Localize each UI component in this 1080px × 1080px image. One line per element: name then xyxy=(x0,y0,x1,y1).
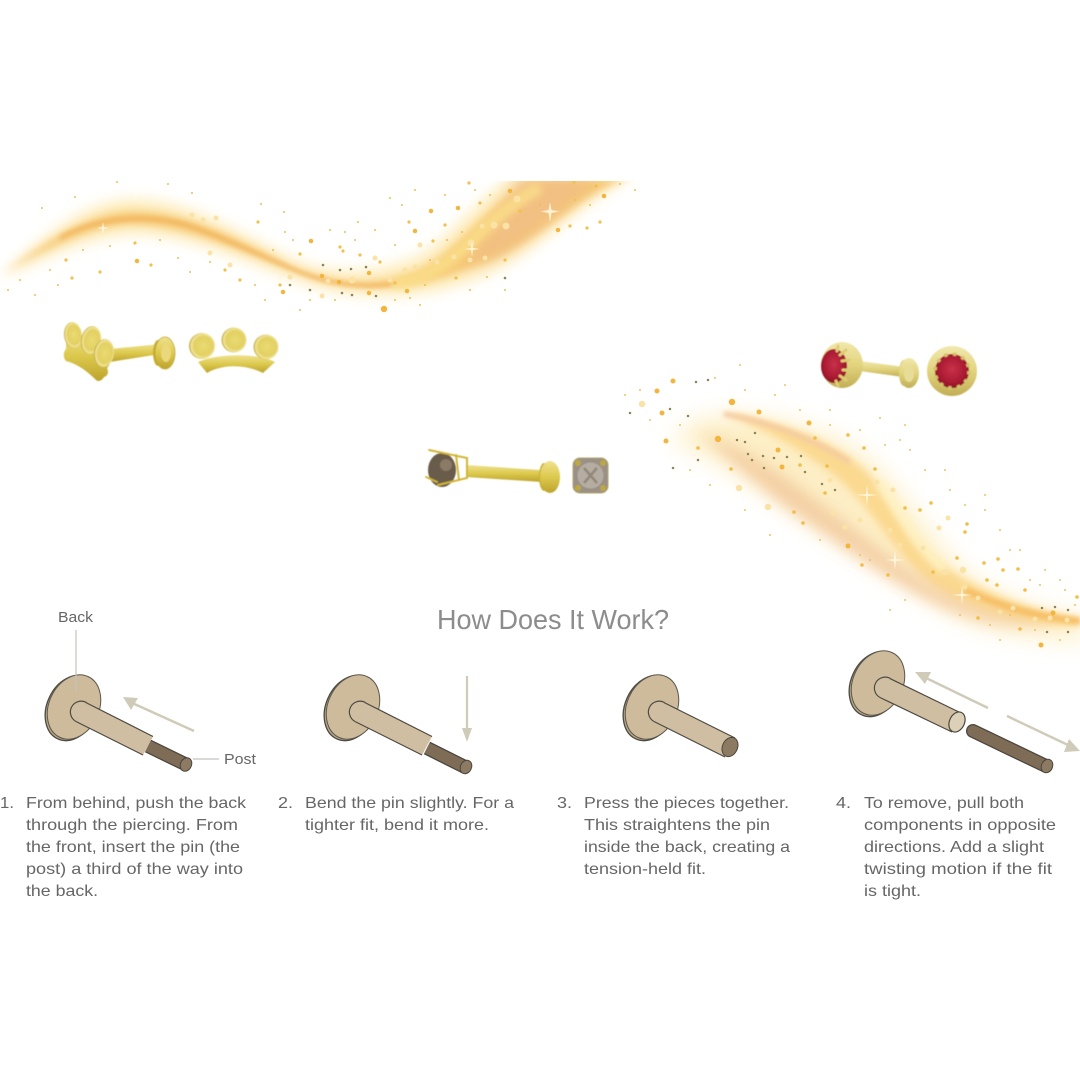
earring: ruby stud xyxy=(821,342,977,396)
step 4 text xyxy=(836,795,1056,900)
icon: sparkles on lower wave xyxy=(856,484,972,605)
step 2 text: Bend the pin slightly. For a xyxy=(305,795,514,812)
background swoosh: lower wave gold dots xyxy=(625,365,1077,645)
step 1 text: the back. xyxy=(26,883,98,900)
step 1 text xyxy=(0,795,247,900)
step 4 text: components in opposite xyxy=(864,817,1056,834)
step 2 text xyxy=(278,795,514,834)
step 4 text: directions. Add a slight xyxy=(864,839,1045,856)
crown stud xyxy=(189,328,278,373)
step 3 text: Press the pieces together. xyxy=(584,795,789,812)
diagram 4: pull apart to remove xyxy=(839,642,1080,775)
step 4 text: is tight. xyxy=(864,883,921,900)
label: Back xyxy=(58,609,94,692)
post piece xyxy=(427,748,474,776)
step 4 text: 4. xyxy=(836,795,851,812)
step 3 text: This straightens the pin xyxy=(584,817,770,834)
post piece xyxy=(973,731,1055,775)
paw head xyxy=(63,321,116,381)
back piece xyxy=(35,666,153,755)
step 3 text: 3. xyxy=(557,795,572,812)
diagram 3: pieces pressed together xyxy=(613,666,741,759)
step 2 text: 2. xyxy=(278,795,293,812)
background swoosh: top gold wave xyxy=(2,181,635,304)
title: How Does It Work? xyxy=(437,604,669,635)
label: Back: Back xyxy=(58,609,94,626)
label: Post xyxy=(193,751,257,768)
back piece xyxy=(314,666,432,755)
arrow: right xyxy=(1007,716,1080,752)
step 3 text xyxy=(557,795,790,878)
diagram 1: back and post assembly xyxy=(35,609,257,773)
icon: sparkles on top wave xyxy=(97,202,560,257)
step 4 text: twisting motion if the fit xyxy=(864,861,1053,878)
step 1 text: the front, insert the pin (the xyxy=(26,839,240,856)
arrow: push in xyxy=(123,697,194,731)
step 1 text: post) a third of the way into xyxy=(26,861,243,878)
background swoosh: top wave gold dots xyxy=(8,180,635,310)
step 3 text: tension-held fit. xyxy=(584,861,706,878)
diagram 2: bend the pin xyxy=(314,666,474,776)
post piece xyxy=(148,746,194,773)
step 3 text: inside the back, creating a xyxy=(584,839,790,856)
background swoosh: lower right gold wave xyxy=(670,412,1080,640)
back piece xyxy=(839,642,968,735)
label: Post: Post xyxy=(224,751,257,768)
step 2 text: tighter fit, bend it more. xyxy=(305,817,489,834)
step 1 text: through the piercing. From xyxy=(26,817,238,834)
step 4 text: To remove, pull both xyxy=(864,795,1024,812)
step 1 text: 1. xyxy=(0,795,14,812)
post of paw earring xyxy=(110,337,175,369)
step 1 text: From behind, push the back xyxy=(26,795,247,812)
arrow: down xyxy=(462,676,472,742)
earring: rough diamond stud xyxy=(426,450,608,493)
earring: paw and crown gold studs xyxy=(63,321,279,381)
arrow: left xyxy=(915,672,988,708)
